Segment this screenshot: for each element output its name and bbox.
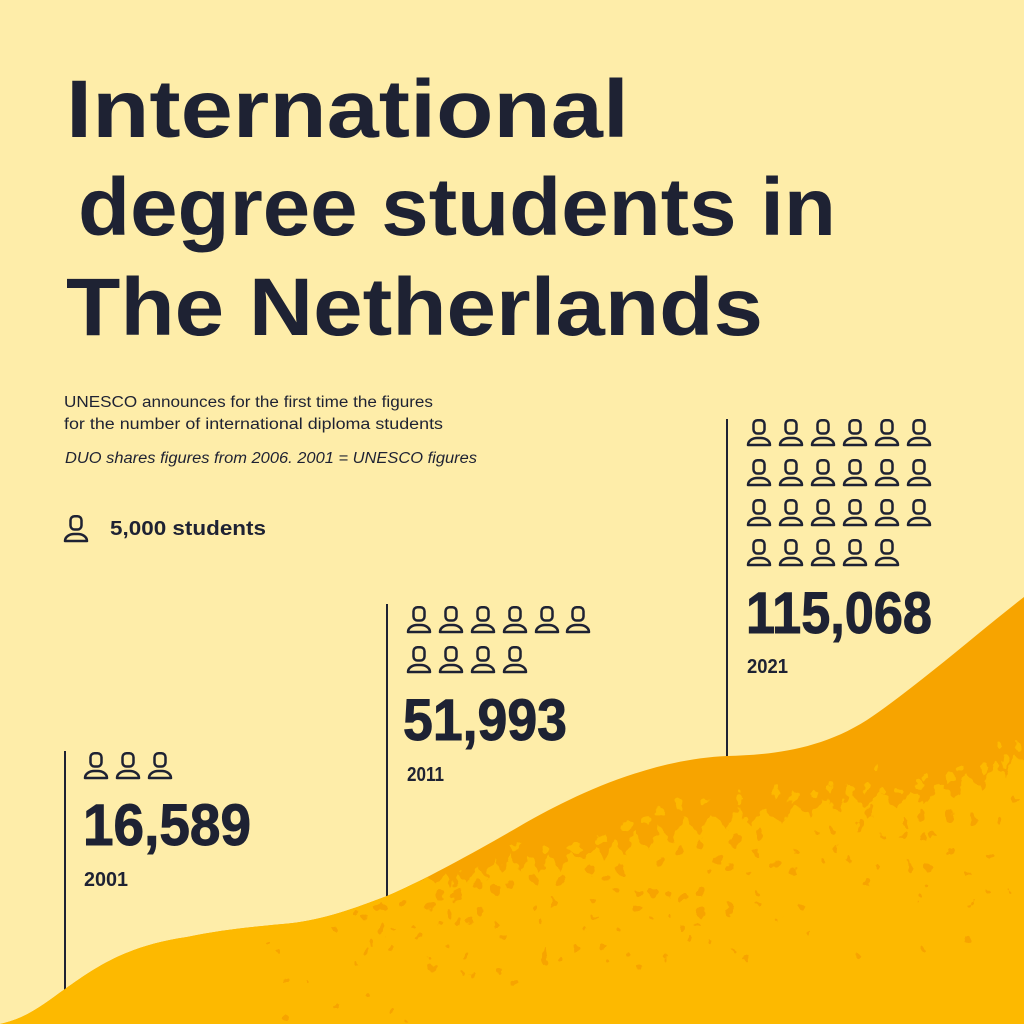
title: The Netherlands — [66, 262, 763, 353]
icons: 3 student figures — [85, 753, 171, 778]
data block: 2011 — [403, 607, 589, 786]
legend: one icon equals 5,000 students — [65, 516, 266, 541]
year: 2001: 2001 — [84, 869, 128, 891]
value: 51,993: 51,993 — [403, 688, 567, 753]
title: International — [66, 64, 629, 155]
icons: 10 student figures — [408, 607, 589, 672]
title: degree students in — [78, 162, 836, 253]
intro text — [64, 394, 477, 467]
intro text: UNESCO announces for the first time the figures — [64, 394, 433, 411]
year: 2021: 2021 — [747, 656, 788, 678]
area: growth curve — [0, 590, 1024, 1024]
data block: 2001 — [83, 753, 251, 891]
legend: one icon equals 5,000 students: 5,000 students — [110, 518, 266, 540]
data block: 2021 — [746, 420, 932, 678]
value: 115,068: 115,068 — [746, 581, 932, 646]
intro text: for the number of international diploma students — [64, 416, 443, 433]
icons: 23 student figures — [748, 420, 930, 565]
intro text: DUO shares figures from 2006. 2001 = UNESCO figures — [65, 450, 477, 467]
year marker lines — [65, 419, 727, 992]
year: 2011: 2011 — [407, 764, 444, 786]
title — [66, 64, 836, 353]
value: 16,589: 16,589 — [83, 793, 251, 858]
